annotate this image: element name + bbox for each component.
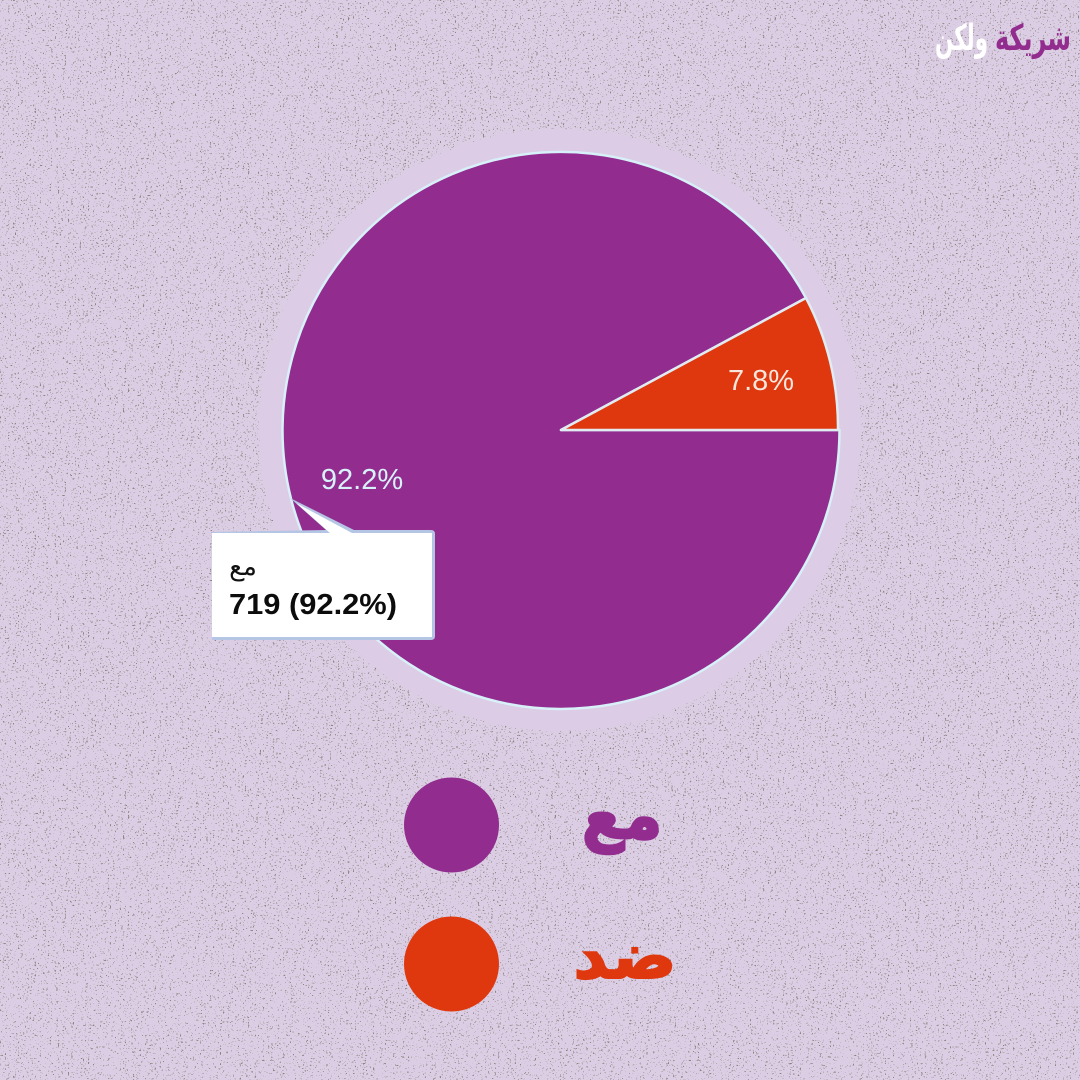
tooltip category: مع bbox=[229, 552, 257, 582]
label 92.2%: 92.2% bbox=[321, 464, 403, 496]
slice: against 7.8% bbox=[561, 298, 838, 430]
pie chart bbox=[259, 129, 861, 731]
tooltip box with pointer bbox=[212, 498, 435, 640]
legend swatch: with bbox=[404, 778, 499, 872]
logo word: white: ولكن bbox=[935, 18, 988, 59]
legend label: against: ضد bbox=[574, 920, 676, 993]
chart halo ring bbox=[259, 129, 861, 731]
legend label: with: مع bbox=[582, 777, 662, 854]
label 7.8%: 7.8% bbox=[728, 365, 794, 397]
tooltip bbox=[212, 498, 435, 640]
legend bbox=[404, 777, 676, 1012]
tooltip value: 719 (92.2%) bbox=[229, 589, 397, 621]
logo bbox=[935, 18, 1071, 59]
slice: with 92.2% bbox=[283, 152, 840, 709]
legend swatch: against bbox=[404, 916, 499, 1012]
